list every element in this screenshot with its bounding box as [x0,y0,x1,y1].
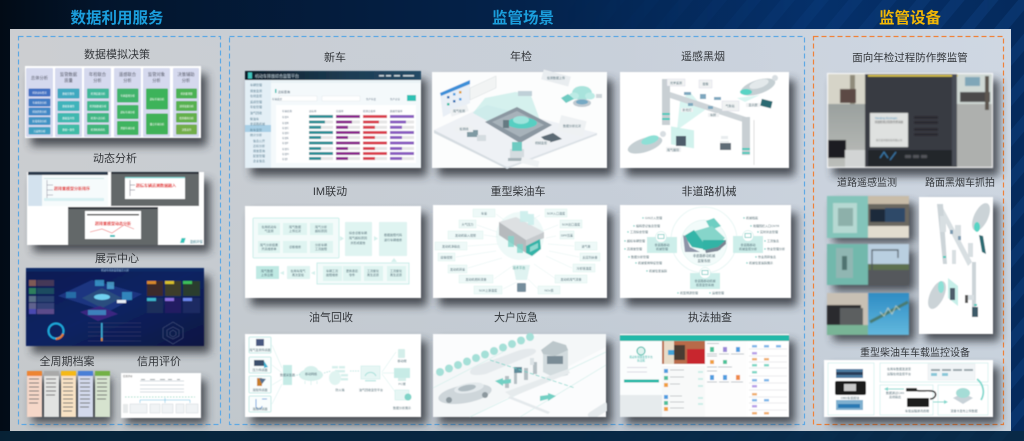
screenshot: new vehicle platform: 生产企业 [390,97,401,101]
panel: data services dashed frame [18,36,220,424]
chart: decision columns: 车辆遥感分析 [121,94,135,98]
chart: decision columns: 超标车辆分析 [150,97,165,101]
diagram: vapor recovery [245,334,421,417]
labels: 数据分析比对 [563,123,581,128]
bottom box: 非道路移动机械 [694,278,716,283]
photo group: road remote sensing [827,196,909,335]
chart: decision columns: 排放趋势分析 [32,110,47,114]
chart: decision columns: 数据一致性 [63,128,75,132]
labels: 检测线 [459,126,469,131]
bar panel [88,323,141,341]
ring gauge [48,324,64,339]
diagram: onboard diesel monitor: 数据通过CAN [886,390,904,395]
screenshot: new vehicle platform: 数据传输率 [390,109,403,113]
bullet lists: 编码登记信息管理 [636,223,660,228]
bullet lists: 实时状态管理 [760,229,778,234]
endpoints: 移动端 [397,358,407,363]
progress bar [101,323,103,341]
flowchart: IM linkage: 并形成报告 [350,240,366,245]
monitor: 油气回收监管平台 [359,387,383,392]
diagram: heavy diesel truck: 冷却液温度 [576,266,592,270]
diagram: onboard diesel monitor [824,360,993,417]
firewall: 防火墙 [335,387,345,392]
illustration: large enterprise emergency [433,333,607,417]
flowchart: IM linkage: 上传比对 [289,228,301,233]
cloud [569,86,595,100]
screenshot: new vehicle platform: 车辆名称 [282,109,293,113]
title: 重型柴油车车载监控设备: 重型柴油车车载监控设备 [860,346,970,359]
title: 油气回收: 油气回收 [309,310,353,324]
title: 遥感黑烟: 遥感黑烟 [681,49,725,63]
flowchart: IM linkage: 尾气分析结果 [260,242,278,247]
labels: 车牌 [710,112,716,117]
dashboard: display center [26,268,204,346]
screenshot: new vehicle platform: 排放查询 [253,148,265,153]
road markings [508,396,550,414]
diagram: vapor recovery: 尾气监测传感器 [249,347,271,352]
car [503,116,537,128]
screenshot: new vehicle platform: 车型G [282,147,289,151]
bottom box [690,268,720,289]
chart: decision columns: 超标车辆分析 [121,110,135,114]
right box: 机械监控分析 [739,246,757,251]
car top right [739,75,778,99]
diagram: heavy diesel truck: SCR入口温度 [547,210,565,216]
bullet lists: GIS计入管理 [645,215,662,220]
chart: decision columns: 排放达标情况 [32,90,47,94]
title: 新车: 新车 [324,50,346,64]
truck photos: OBD车载模块 [841,395,859,400]
cards: lifecycle archive [27,371,110,417]
diagram: heavy diesel truck: 大气压力 [461,222,474,226]
middle column: scenarios [245,49,791,417]
diagram: onboard diesel monitor: 总线输出 [889,394,901,399]
flowchart: IM linkage: 根据故障代码 [384,232,402,237]
flow screen [747,341,789,417]
title: 动态分析: 动态分析 [93,151,137,165]
monitor [720,99,773,150]
truck [499,211,544,256]
dashboard snippet: 在用车数据发送至 [887,366,911,371]
flowchart: IM linkage: 工况催化 [390,268,402,273]
panel: scenarios dashed frame [230,36,804,424]
truck photos [835,369,866,410]
diagram: heavy diesel truck: 发动机输入扭矩 [455,232,476,238]
diagram: vapor recovery: 数据采集器 [280,372,295,377]
screenshot: new vehicle platform: 遥感管理 [250,99,262,104]
screen 3: 超排量模型动态分析 [95,220,131,226]
screenshot: new vehicle platform: 油气回收 [250,110,262,115]
booth [490,341,575,397]
heading: 监管设备: 监管设备 [879,8,941,27]
right box [733,230,763,253]
labels: 尾气检测 [453,108,465,113]
flowchart: IM linkage: 尾气数据 [261,268,273,273]
screenshot: new vehicle platform: 新车监管 [250,127,262,132]
bottom box: 核查监管系统 [696,282,714,287]
panel: devices dashed frame [814,36,1004,424]
flowchart: IM linkage: 再生还原 [390,272,402,277]
device and cable: 车载远程通讯终端 [905,408,929,413]
labels: 光学遥测 [670,80,682,85]
chart: decision columns: 年检联合 [89,71,107,78]
bullet lists: 工况信息 [767,238,779,243]
screenshot: new vehicle platform: 柴油车 [250,116,259,121]
screen 1: 超排量模型分析排序 [54,185,90,191]
chart: decision columns: 分析 [182,77,191,84]
diagram: non-road machinery: 非道路移动机械 [693,253,716,258]
flowchart: IM linkage: 诊断维修 [289,244,301,249]
table: credit rating [121,373,201,418]
diagram: heavy diesel truck [433,205,607,298]
heading: 数据利用服务: 数据利用服务 [70,8,164,27]
bullet lists: 机械档案 [746,215,758,220]
photo: anti-fraud cabinet [827,73,993,168]
screen 1 [28,172,108,206]
left column: data services [25,47,204,418]
flowchart: IM linkage: 气监测 [264,228,274,233]
bullet lists: 地理围栏入口CNTR [753,223,780,228]
diagram: heavy diesel truck: 进气量 [581,244,591,248]
radar [163,322,183,344]
illustration: black smoke capture [919,197,994,334]
diagram: heavy diesel truck: SCR出口温度 [562,222,580,226]
screenshot: new vehicle platform: 检测合格率 [363,109,376,113]
server [561,94,602,107]
chart: decision columns: 情景模拟分析 [179,116,194,120]
screenshot: new vehicle platform: 非道路机械 [250,121,265,126]
labels: 视频监控 [535,140,547,145]
device [467,130,562,161]
chart: decision columns: 区域排放分析 [32,119,47,123]
screenshot: new vehicle platform: 车辆管理 [250,82,262,87]
gantry [662,79,754,165]
title: 展示中心: 展示中心 [95,252,139,265]
cloud platform [950,388,978,413]
logo [180,238,204,244]
login screen: 执法端 [637,358,645,362]
flowchart: IM linkage: 在用车尾气 [290,268,306,273]
cloud: 移动网络 [305,371,317,376]
photo 4 [868,244,909,285]
teal dot row [436,333,534,376]
chart: decision columns: 检测机构排名 [91,128,106,132]
login screen [620,341,662,417]
labels: 检测数据上传 [547,75,565,80]
inspection cone [473,92,540,128]
diagram: heavy diesel truck: DPF压差 [561,232,573,238]
diagram: vapor recovery: 压力传感器 [252,367,268,372]
screenshot: new vehicle platform: 车型A [282,115,289,119]
title: 全周期档案: 全周期档案 [40,354,94,368]
endpoints: 数据分析展示 [393,405,411,410]
chart: decision columns: 检测结果分析 [91,92,106,96]
screenshot: enforcement app [620,334,789,417]
title: 非道路机械: 非道路机械 [682,184,736,198]
flowchart: IM linkage: 在用机动车 [261,224,277,229]
firewall [329,366,348,392]
title: 路面黑烟车抓拍: 路面黑烟车抓拍 [925,176,995,189]
flowchart: IM linkage: 尾气分析 [315,224,327,229]
chart: decision columns: 数据及时性 [63,116,75,120]
diagram: heavy diesel truck: 摩擦扭矩 [440,254,453,260]
screenshot: new vehicle platform: 生产年度 [366,97,377,101]
cloud [299,366,323,385]
illustration: annual inspection [432,70,607,169]
dashboard snippet [887,364,975,380]
title: 重型柴油车: 重型柴油车 [490,184,546,198]
diagram: heavy diesel truck: NOx值 [544,288,554,292]
labels [450,70,587,167]
white control box: Nanjing Ecologic [875,116,898,120]
flowchart: IM linkage: 故障维修 [326,272,338,277]
shadows behind images [31,74,999,424]
arrows [495,378,556,401]
bullet lists: 作业周转信息 [758,254,776,259]
labels: 摄像 [702,81,709,86]
bullet lists: 机械位置追踪展示 [749,260,773,265]
chart: decision columns: 分析 [152,77,161,84]
chart: decision columns: 车辆排放分析 [32,100,47,104]
chart: decision columns: 决策支持 [182,128,192,132]
diagram: heavy diesel truck: 发动机燃料流量 [465,276,487,282]
bullet lists: 机械使用特征管理 [638,260,662,265]
right column: devices [824,51,995,417]
chart: decision columns: 监管对象 [148,71,166,78]
screenshot: new vehicle platform: 信息公开 [253,138,265,143]
title: IM联动: IM联动 [313,185,347,198]
flowchart: IM linkage: 车辆工况 [326,268,338,273]
flowchart: IM linkage: 上传云端 [261,272,273,277]
screenshot: new vehicle platform: 机动车排放综合监管平台 [255,72,299,78]
screenshot: new vehicle platform: 车型D [282,131,289,135]
right box: 非道路移动 [740,242,756,247]
labels [666,79,760,152]
labels: 尾气烟羽 [667,147,679,152]
diagram: heavy diesel truck: 反应剂余量 [582,254,598,260]
car [437,380,493,408]
chart: decision columns: 监管数据 [60,71,78,78]
diagram: heavy diesel truck: 发动机尾气流量 [560,276,582,282]
flowchart: IM linkage: 更换易损 [346,268,358,273]
labels: 气象站 [725,103,735,108]
screenshot: new vehicle platform: 车型F [282,141,289,145]
left box [647,232,677,253]
screenshot: new vehicle platform: 达标率 [309,109,317,113]
screenshot: new vehicle platform: 配置管理 [253,153,265,158]
screenshot: new vehicle platform: 车型C [282,126,289,130]
diagram: vapor recovery: 液阻传感器 [252,387,268,392]
diagram: heavy diesel truck: 技术平台 [513,265,525,270]
login screen: 机动车排放监管平台 [629,355,653,359]
bullet lists [624,215,785,295]
labels: 补光灯 [682,107,692,112]
bulldozer [683,218,726,253]
chart: decision columns: 分析 [123,77,132,84]
flowchart: IM linkage [245,206,421,298]
flowchart: IM linkage: 工况催化 [367,268,379,273]
chart: decision columns: 黑烟车辆分析 [121,126,135,130]
arrows [887,379,983,402]
flowchart: IM linkage: 工况故障 [315,246,327,251]
chart: decision columns: 重点车辆分析 [150,122,165,126]
flowchart: IM linkage: 尾气数据 [289,224,301,229]
right alert cards [147,281,200,313]
screenshot: new vehicle platform: 在线监控 [250,93,262,98]
diagram: non-road machinery: 监管系统 [698,258,711,263]
title: 大户应急: 大户应急 [494,310,538,324]
left stats [29,280,54,314]
diagram: heavy diesel truck: 发动机净输出 [442,244,460,248]
photo 6 [868,293,909,335]
chart: decision columns: 排放量测算 [181,92,193,96]
screenshot: new vehicle platform: 企业信息 [253,158,265,163]
bullet lists: 运维管理 [712,290,724,295]
diagram: heavy diesel truck: SCR上游温度 [479,288,497,292]
bullet lists: 高排放管理 [627,246,642,251]
field labels [435,209,600,294]
diagram: non-road machinery [620,205,791,298]
title: 年检: 年检 [510,49,532,63]
bullet lists: 工况综合管理 [630,229,648,234]
photo 2 [868,196,909,238]
dashboard snippet: 远程在线监控平台 [887,371,911,376]
cloud platform: 流量卡发布上传数据 [950,408,978,413]
bullet lists: 机械位置追踪 [649,268,667,273]
white control box: 排放检测过程防作弊系统 [875,120,904,124]
bullet lists: 超标车辆管理 [627,238,645,243]
menu screen [705,341,747,417]
flowchart: IM linkage: 再次复检 [292,272,304,277]
chart: decision columns: 数据准确性 [63,104,75,108]
screenshot: new vehicle platform: 车型I [282,157,288,161]
photo 5 [827,293,868,335]
screenshot: new vehicle platform: 车型E [282,136,289,140]
chart: decision columns: 减排效果分析 [179,104,194,108]
white control box [870,113,908,147]
title: 道路遥感监测: 道路遥感监测 [837,176,897,189]
flowchart: IM linkage: 再生还原 [367,272,379,277]
left box: 机械管理 [656,246,668,251]
bullet lists: 作业管理分析 [767,246,785,251]
bullet lists: 数据分析管理 [631,254,649,259]
diagram: heavy diesel truck: 车速 [481,210,487,216]
screenshot: new vehicle platform: 排放监测 [250,88,262,93]
screenshot: new vehicle platform: 车型H [282,152,289,156]
chart: decision columns: 检测人员分析 [91,116,106,120]
isometric city [58,280,142,321]
chart: decision columns [25,66,201,138]
screenshots: dynamic analysis [27,172,204,245]
photo 3 [827,244,868,285]
flowchart: IM linkage: 零件 [349,272,355,277]
screenshot: new vehicle platform: 在线率 [336,109,344,113]
photo 1 [827,196,868,238]
bullet lists: 机型溯源管理 [680,290,698,295]
logo: 盈帆环保 [190,239,204,244]
illustration: remote sensing gantry [620,72,789,168]
left box: 非道路移动 [654,242,670,247]
chart: decision columns: 污染物分析 [34,129,46,133]
endpoints: PC端 [398,381,406,386]
islands [470,349,536,375]
flowchart: IM linkage: 尾气超标原因 [349,235,367,240]
labels: 显示屏 [748,103,758,107]
device and cable [905,388,936,413]
title: 信用评价: 信用评价 [137,355,181,368]
screenshot: new vehicle platform: 统计分析 [250,132,262,137]
car bottom left [626,131,666,157]
chart: decision columns: 数据完整性 [63,92,75,96]
endpoints [393,349,412,410]
chart: decision columns: 质量 [64,77,73,84]
screen 2 [111,172,199,206]
screen 2: 超标车辆追溯数据融入 [136,182,176,188]
screenshot: new vehicle platform: 达标分析 [253,143,265,148]
ui card [440,76,496,117]
dashboard: display center: 机动车排放监管展示大屏 [101,268,129,272]
screenshot: new vehicle platform: 达标查询 [278,89,290,94]
chart: decision columns: 分析 [93,77,102,84]
diagram: heavy diesel truck: 发动机转速 [450,266,465,272]
chart: decision columns: 总体分析 [31,74,49,82]
title: 执法抽查: 执法抽查 [688,310,732,324]
flowchart: IM linkage: 开具维修单 [261,246,277,251]
chart: decision columns: 遥感联合 [119,71,137,78]
flowchart: IM linkage: 综合诊断车辆 [349,230,367,235]
table: credit rating: 信用评价 [123,374,133,378]
chart: decision columns: 检测线数据分析 [90,104,107,108]
flowchart: IM linkage: 超标原因 [315,228,327,233]
title: 数据模拟决策: 数据模拟决策 [84,47,150,61]
flowchart: IM linkage: 进行车辆维修 [384,237,402,242]
white control box: 南京某环保科技有限公司 [876,138,903,142]
screenshot: new vehicle platform: 车辆类型 [272,97,283,101]
chart: decision columns: 决策辅助 [177,71,195,78]
screen 3 [68,207,158,245]
monitor [359,366,383,392]
screenshot: new vehicle platform: 年检管理 [250,104,262,109]
flowchart: IM linkage: 分析车辆 [315,242,327,247]
diagram: vapor recovery: 液阻传感器 [252,406,268,411]
heading: 监管场景: 监管场景 [492,8,554,27]
screenshot: new vehicle platform [245,71,421,168]
title: 面向年检过程防作弊监管: 面向年检过程防作弊监管 [852,51,968,64]
list screen [662,341,705,417]
screenshot: new vehicle platform: 车型B [282,121,289,125]
